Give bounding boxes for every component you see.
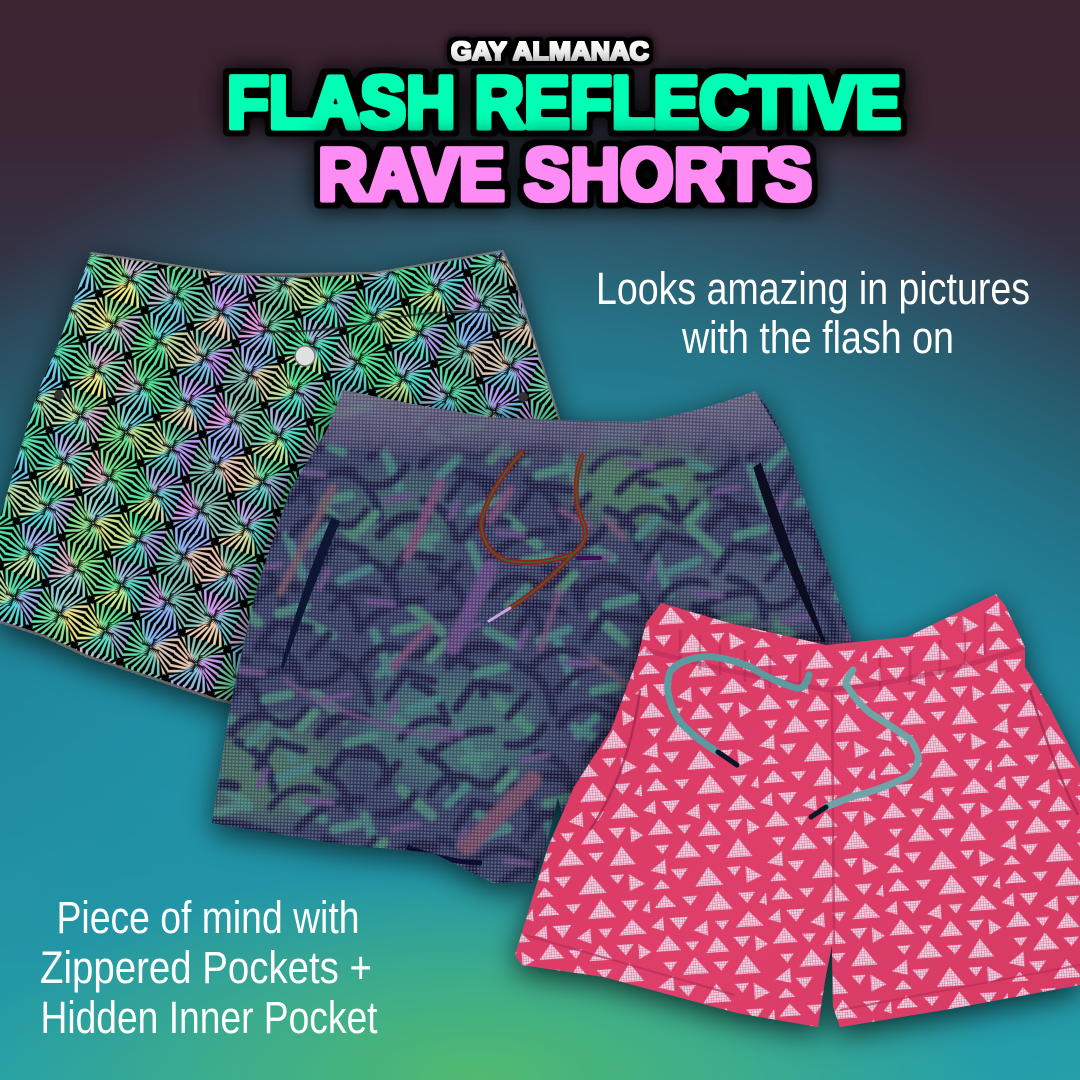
shorts: iridescent geometric pair [0, 240, 570, 720]
pocket left [282, 520, 338, 668]
shorts: pink triangle pair [500, 590, 1080, 1050]
heading: Rave Shorts: RAVE SHORTS [318, 133, 812, 216]
pocket right [755, 465, 824, 642]
drawstring: teal [668, 657, 918, 817]
callout line 1: Piece of mind with [56, 892, 360, 943]
heading: Flash Reflective: FLASH REFLECTIVE [227, 61, 901, 144]
brand line: Gay Almanac: GAY ALMANAC [451, 36, 649, 66]
callout line 2: with the flash on [681, 312, 954, 363]
drawstring: red and green [481, 452, 600, 621]
rivet left [54, 390, 64, 400]
rivet right [518, 392, 528, 402]
title block [227, 36, 901, 216]
callout line 2: Zippered Pockets + [40, 942, 372, 993]
button [295, 346, 315, 366]
callout line 3: Hidden Inner Pocket [40, 992, 378, 1043]
callout: pockets benefit [40, 892, 378, 1043]
shorts: dark swirl reflective pair [200, 385, 860, 975]
callout: flash benefit [596, 263, 1030, 363]
